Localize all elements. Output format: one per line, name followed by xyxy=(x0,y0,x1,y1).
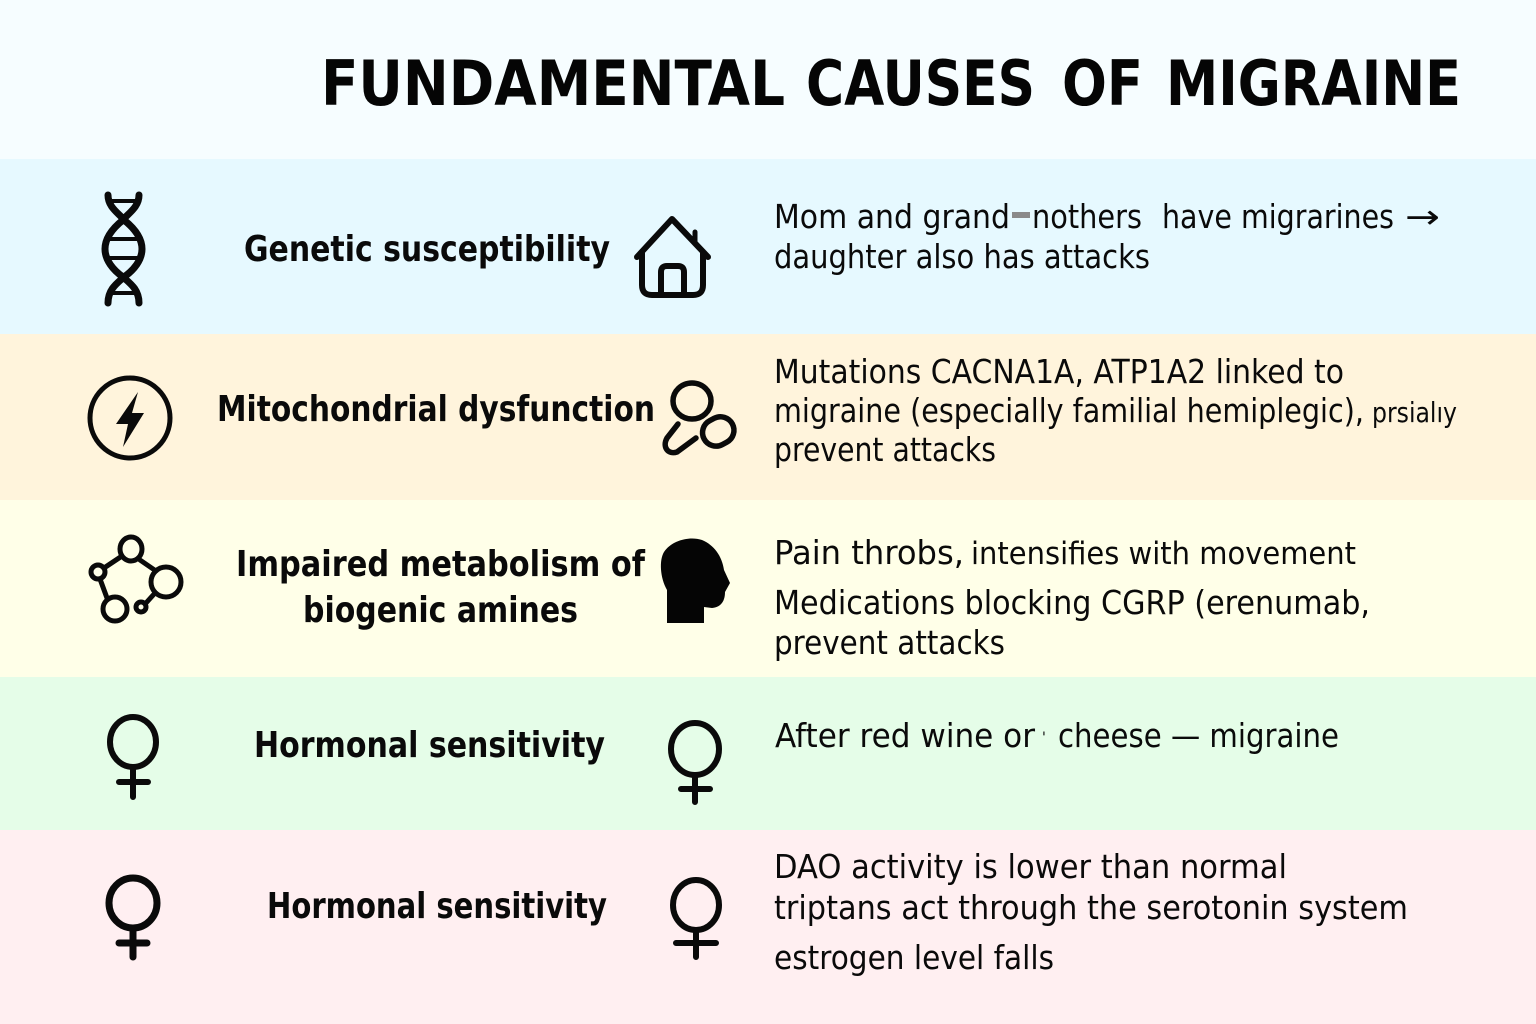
icon: lightning bolt in circle xyxy=(90,378,170,458)
description: family history: nothers xyxy=(1032,197,1142,236)
label: impaired metabolism of biogenic amines xyxy=(236,544,645,631)
description: family history: → xyxy=(1405,197,1440,236)
description: pain and medications: Medications blocking CGRP (erenumab, xyxy=(774,583,1370,622)
description: wine and cheese trigger: After red wine or xyxy=(775,716,1035,755)
title: MIGRAINE xyxy=(1166,47,1461,120)
description: family history xyxy=(774,197,1440,276)
label: hormonal sensitivity: Hormonal sensitivity xyxy=(254,725,605,766)
icon: head silhouette xyxy=(661,538,730,623)
title: CAUSES xyxy=(806,47,1035,120)
description: pain and medications: prevent attacks xyxy=(774,623,1005,662)
icon: female symbol left xyxy=(109,878,157,957)
title band background xyxy=(0,0,1536,159)
description: gene mutations: migraine (especially familial hemiplegic), xyxy=(774,391,1364,430)
description: family history: have migrarines xyxy=(1162,197,1394,236)
description: DAO, triptans and estrogen xyxy=(774,847,1408,977)
description: pain and medications xyxy=(774,533,1370,662)
description: wine and cheese trigger: cheese — migraine xyxy=(1058,716,1339,755)
icon: linked circles xyxy=(665,383,739,453)
panel: hormonal sensitivity, wine and cheese xyxy=(0,677,1536,830)
panel: mitochondrial dysfunction xyxy=(0,334,1536,500)
description: pain and medications: intensifies with movement xyxy=(971,536,1356,572)
label: hormonal sensitivity: Hormonal sensitivity xyxy=(267,886,607,927)
description: gene mutations: prsialıy xyxy=(1372,396,1457,429)
description: DAO, triptans and estrogen: DAO activity is lower than normal xyxy=(774,847,1287,886)
icon: molecule xyxy=(91,537,181,621)
description: family history: daughter also has attacks xyxy=(774,237,1150,276)
icon: DNA helix xyxy=(105,195,142,303)
label: mitochondrial dysfunction: Mitochondrial dysfunction xyxy=(217,389,655,430)
icon: female symbol right xyxy=(671,723,719,802)
description: pain and medications: Pain throbs, xyxy=(774,533,964,572)
description: gene mutations: prevent attacks xyxy=(774,430,996,469)
description: gene mutations xyxy=(774,352,1457,469)
title: OF xyxy=(1062,47,1143,120)
panel: hormonal sensitivity, DAO and estrogen xyxy=(0,830,1536,1024)
description: wine and cheese trigger xyxy=(775,716,1339,755)
description: wine and cheese trigger: ' xyxy=(1042,730,1046,746)
label: impaired metabolism of biogenic amines: biogenic amines xyxy=(303,590,578,631)
icon: female symbol right xyxy=(673,880,719,957)
icon: female symbol left xyxy=(110,717,156,797)
description: gene mutations: Mutations CACNA1A, ATP1A2 linked to xyxy=(774,352,1344,391)
title xyxy=(321,47,1461,120)
description: DAO, triptans and estrogen: triptans act through the serotonin system xyxy=(774,888,1408,927)
label: genetic susceptibility: Genetic susceptibility xyxy=(244,229,610,270)
title: FUNDAMENTAL xyxy=(321,47,785,120)
panel: impaired metabolism of biogenic amines xyxy=(0,500,1536,677)
description: family history: Mom and grand xyxy=(774,197,1010,236)
label: impaired metabolism of biogenic amines: Impaired metabolism of xyxy=(236,544,645,585)
icon: house xyxy=(637,219,708,295)
description: DAO, triptans and estrogen: estrogen level falls xyxy=(774,938,1054,977)
panel: genetic susceptibility xyxy=(0,159,1536,334)
